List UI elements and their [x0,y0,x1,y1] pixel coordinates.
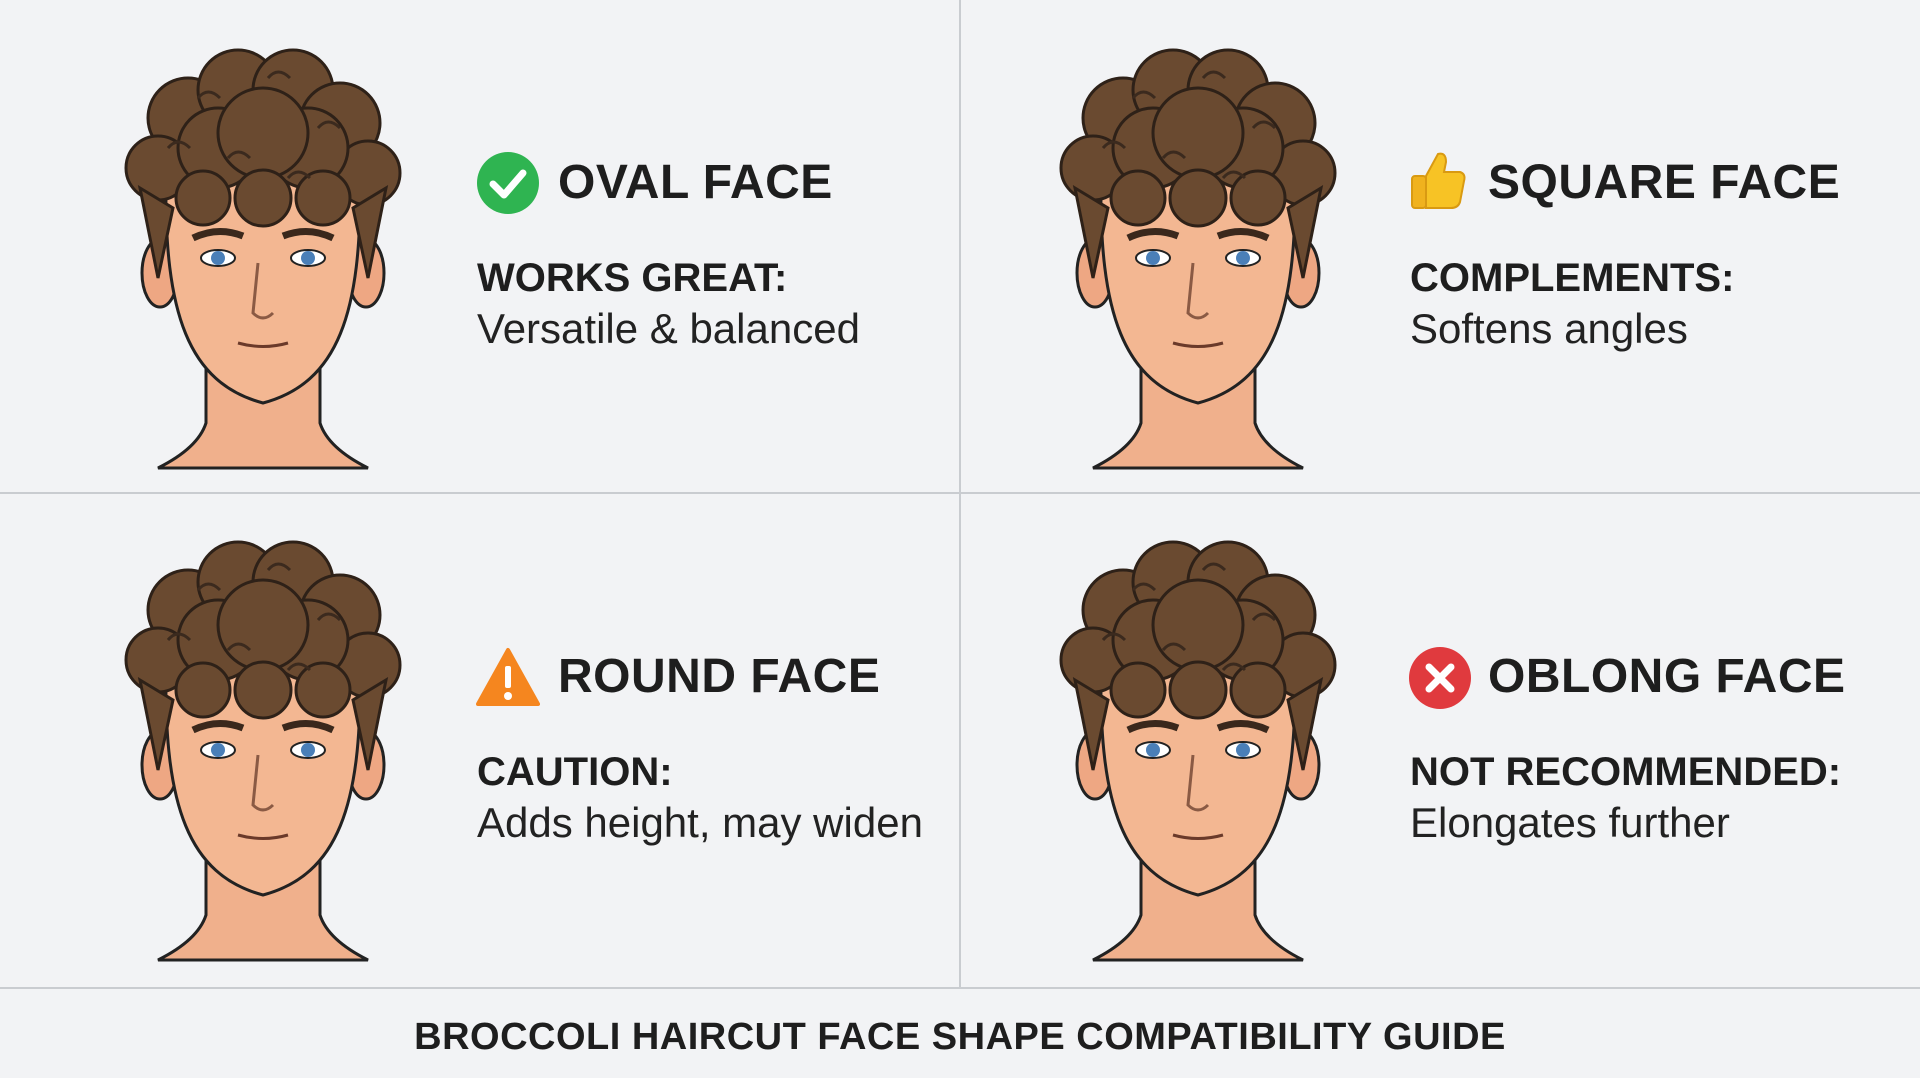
face illustration: round [124,540,402,962]
panel: round face [124,540,923,962]
icon: warning [476,648,540,706]
heading: round face: ROUND FACE [558,650,880,703]
label: NOT RECOMMENDED: [1410,750,1841,794]
heading: oblong face: OBLONG FACE [1488,650,1846,703]
face illustration: oblong [1060,540,1336,962]
icon: green check [477,152,539,214]
face illustration: oval [124,48,402,470]
footer title: BROCCOLI HAIRCUT FACE SHAPE COMPATIBILITY GUIDE [414,1016,1506,1058]
description: Softens angles [1410,305,1688,352]
heading: square face: SQUARE FACE [1488,156,1840,209]
icon: thumbs up [1411,152,1466,209]
panel: square face [1060,48,1840,470]
description: Versatile & balanced [477,305,860,352]
label: CAUTION: [477,750,673,794]
panel: oval face [124,48,860,470]
panel: oblong face [1060,540,1846,962]
icon: red cross [1409,647,1471,709]
face illustration: square [1060,48,1336,470]
label: WORKS GREAT: [477,256,787,300]
heading: oval face: OVAL FACE [558,156,833,209]
label: COMPLEMENTS: [1410,256,1734,300]
description: Elongates further [1410,799,1730,846]
description: Adds height, may widen [477,799,923,846]
